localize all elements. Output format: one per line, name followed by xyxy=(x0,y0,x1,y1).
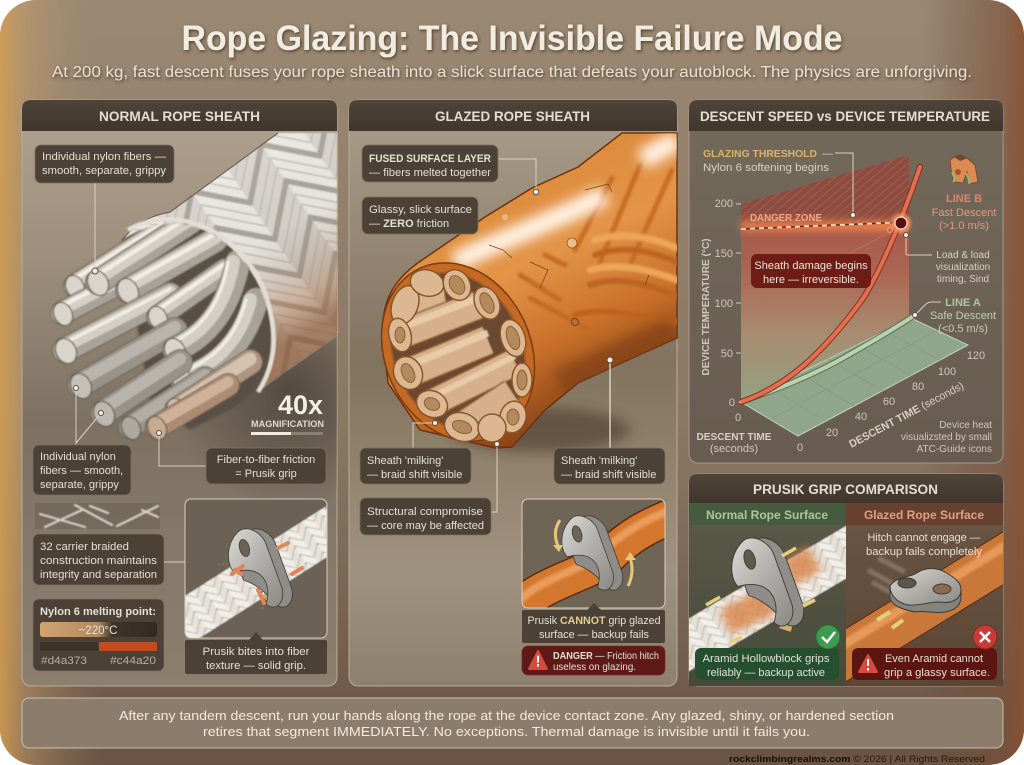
y axis labels: 50 xyxy=(721,348,733,360)
depth axis labels: 20 xyxy=(826,427,838,439)
chart floor xyxy=(741,318,968,436)
melting point card: ~220°C xyxy=(79,625,117,637)
callout: sheath milking right: — braid shift visible xyxy=(561,469,656,481)
caption: aramid grips: reliably — backup active xyxy=(707,667,825,679)
callout: structural compromise xyxy=(360,442,500,535)
caption: prusik cannot grip xyxy=(522,603,665,643)
label: glazing threshold xyxy=(703,148,856,218)
callout: sheath milking left: — braid shift visible xyxy=(367,469,462,481)
callout: load visualization: timing, Sind xyxy=(937,274,989,285)
caption: prusik cannot grip: surface — backup fails xyxy=(539,629,649,641)
callout: structural compromise: — core may be affected xyxy=(367,520,484,532)
note: device heat: visualizsted by small xyxy=(901,432,992,443)
legend: line A: (<0.5 m/s) xyxy=(938,323,988,335)
callout: sheath damage: Sheath damage begins xyxy=(754,260,868,272)
icon: cross xyxy=(973,625,997,649)
callout: 32 carrier braid: construction maintains xyxy=(40,555,158,567)
legend: line B: Fast Descent xyxy=(932,207,996,219)
x axis title xyxy=(696,431,772,455)
rope illustration: normal sheath with exposed fibers xyxy=(50,133,337,443)
danger point marker xyxy=(891,213,911,233)
illustration: slip on glazed rope xyxy=(830,540,1015,665)
label: glazing threshold: — xyxy=(822,148,833,160)
subtitle: At 200 kg, fast descent fuses your rope sheath into a slick surface that defeats your autoblock. The physics are unforgiving. xyxy=(52,64,972,81)
column: glazed rope surface xyxy=(846,503,1003,686)
y axis labels: 200 xyxy=(715,198,733,210)
chart back wall xyxy=(741,155,909,402)
legend: line B xyxy=(932,193,996,232)
panel header: glazed xyxy=(349,100,677,131)
panel header: chart: DESCENT SPEED vs DEVICE TEMPERATURE xyxy=(700,109,990,124)
callout: glassy surface: — ZERO friction xyxy=(369,218,449,230)
y axis labels: 150 xyxy=(715,248,733,260)
caption: aramid grips: Aramid Hollowblock grips xyxy=(702,653,830,665)
text: hitch cannot engage xyxy=(866,532,982,558)
callout: fiber friction: = Prusik grip xyxy=(235,468,297,480)
depth axis title: DESCENT TIME (seconds) xyxy=(847,380,966,451)
depth axis labels: 60 xyxy=(883,396,895,408)
danger warning: useless on glazing. xyxy=(553,661,636,673)
callout: individual fibers lower xyxy=(33,386,131,495)
magnification badge: MAGNIFICATION xyxy=(251,419,324,429)
melting point card: #d4a373 xyxy=(41,655,87,667)
subheader: glazed surface: Glazed Rope Surface xyxy=(864,508,984,522)
callout: sheath milking left xyxy=(360,420,471,484)
callout: fused surface layer: FUSED SURFACE LAYER xyxy=(369,153,491,165)
y axis title: DEVICE TEMPERATURE (°C) xyxy=(700,238,712,376)
label: danger zone: DANGER ZONE xyxy=(750,212,822,224)
legend: line A: LINE A xyxy=(945,297,981,309)
icon: loose fibre strands xyxy=(35,503,160,529)
bottom advisory bar: After any tandem descent, run your hands along the rope at the device contact zone. Any glazed, shiny, or hardened section xyxy=(119,708,894,723)
panel header: chart xyxy=(689,100,1003,131)
callout: fused surface layer: — fibers melted together xyxy=(369,167,491,179)
label: glazing threshold: GLAZING THRESHOLD xyxy=(703,148,817,160)
note: device heat: ATC-Guide icons xyxy=(917,444,992,455)
melting point card: Nylon 6 melting point: xyxy=(40,606,156,618)
depth axis labels: 0 xyxy=(797,442,803,454)
depth axis labels: 100 xyxy=(938,366,956,378)
note: device heat: Device heat xyxy=(939,420,992,431)
melting point card xyxy=(33,599,164,671)
danger warning xyxy=(522,646,665,675)
callout: fiber friction xyxy=(156,430,326,484)
callout: individual fibers top xyxy=(35,145,174,274)
panel: descent speed chart xyxy=(689,100,1003,463)
callout: glassy surface: Glassy, slick surface xyxy=(369,204,472,216)
line B: fast descent xyxy=(741,167,920,402)
line A: safe descent xyxy=(741,317,912,402)
caption: prusik cannot grip: Prusik CANNOT grip glazed xyxy=(528,615,660,627)
callout: sheath milking right: Sheath 'milking' xyxy=(561,455,637,467)
callout: load visualization xyxy=(904,232,990,285)
subheader: normal surface: Normal Rope Surface xyxy=(706,508,828,522)
y axis labels xyxy=(715,198,741,424)
text: hitch cannot engage: Hitch cannot engage — xyxy=(868,532,980,544)
depth axis labels: 120 xyxy=(967,350,985,362)
illustration: grip on normal rope xyxy=(675,538,860,653)
callout: structural compromise: Structural compromise xyxy=(367,506,483,518)
text: hitch cannot engage: backup fails completely xyxy=(866,546,982,558)
magnification badge xyxy=(251,390,324,435)
caption: aramid cannot grip xyxy=(852,648,997,680)
panel header: normal xyxy=(22,100,337,131)
panel header: glazed: GLAZED ROPE SHEATH xyxy=(435,109,590,124)
bottom advisory bar: retires that segment IMMEDIATELY. No exceptions. Thermal damage is invisible until it fails you. xyxy=(203,724,810,739)
icon: orange device xyxy=(950,154,978,184)
y axis labels: 0 xyxy=(729,397,735,409)
legend: line B: (>1.0 m/s) xyxy=(939,220,989,232)
caption: prusik bites xyxy=(185,632,327,674)
legend: line B: LINE B xyxy=(946,193,982,205)
note: device heat xyxy=(901,420,992,455)
panel header: normal: NORMAL ROPE SHEATH xyxy=(99,109,260,124)
threshold glow and dashed line xyxy=(741,221,908,231)
panel: glazed rope sheath xyxy=(349,100,677,686)
callout: sheath damage: here — irreversible. xyxy=(763,274,859,286)
y axis labels: 100 xyxy=(715,298,733,310)
callout: fused surface layer xyxy=(362,145,539,195)
icon: check xyxy=(816,625,840,649)
callout: sheath milking left: Sheath 'milking' xyxy=(367,455,443,467)
callout: 32 carrier braid: 32 carrier braided xyxy=(40,541,129,553)
depth axis labels: 80 xyxy=(912,381,924,393)
callout: glassy surface xyxy=(362,197,478,234)
magnification badge: 40x xyxy=(278,390,323,420)
title: Rope Glazing: The Invisible Failure Mode xyxy=(182,19,842,58)
melting point card: #c44a20 xyxy=(110,655,156,667)
caption: aramid cannot grip: Even Aramid cannot xyxy=(885,653,983,665)
3d line chart xyxy=(696,155,985,455)
callout: individual fibers top: smooth, separate, grippy xyxy=(42,165,166,177)
callout: sheath milking right xyxy=(554,357,665,484)
callout: 32 carrier braid: integrity and separation xyxy=(40,569,157,581)
x axis title: DESCENT TIME xyxy=(696,431,772,443)
panel: normal rope sheath xyxy=(22,100,337,686)
callout: 32 carrier braid xyxy=(33,534,185,585)
callout: individual fibers lower: separate, grippy xyxy=(40,479,119,491)
icon: warning triangle xyxy=(529,651,547,669)
label: glazing threshold: Nylon 6 softening begins xyxy=(703,162,830,174)
callout: individual fibers top: Individual nylon fibers — xyxy=(42,151,166,163)
panel: prusik grip comparison xyxy=(675,474,1015,686)
column: normal rope surface xyxy=(689,503,846,686)
callout: load visualization: Load & load xyxy=(936,250,990,261)
prusik inset: fails on glazed rope xyxy=(522,498,666,608)
callout: load visualization: visualization xyxy=(936,262,990,273)
bottom advisory bar xyxy=(22,698,1003,748)
danger warning: DANGER — Friction hitch xyxy=(553,650,659,662)
prusik inset: solid grip xyxy=(184,498,328,638)
subheader: normal surface xyxy=(689,503,846,525)
caption: aramid cannot grip: grip a glassy surface. xyxy=(884,667,990,679)
subheader: glazed surface xyxy=(846,503,1003,525)
legend: line A: Safe Descent xyxy=(930,310,996,322)
caption: prusik bites: Prusik bites into fiber xyxy=(202,646,310,658)
caption: aramid grips xyxy=(695,648,839,680)
depth axis labels: 40 xyxy=(855,411,867,423)
callout: fiber friction: Fiber-to-fiber friction xyxy=(217,454,315,466)
depth axis labels xyxy=(797,350,985,454)
footer credit: rockclimbingrealms.com © 2026 | All Rights Reserved xyxy=(729,754,985,765)
callout: individual fibers lower: Individual nylon xyxy=(40,451,116,463)
callout: sheath damage xyxy=(751,228,892,288)
x axis title: (seconds) xyxy=(710,443,758,455)
y axis labels: 0 xyxy=(735,412,741,424)
caption: prusik bites: texture — solid grip. xyxy=(206,660,306,672)
panel header: prusik comparison: PRUSIK GRIP COMPARISON xyxy=(753,482,938,497)
legend: line A xyxy=(912,297,996,335)
callout: individual fibers lower: fibers — smooth, xyxy=(40,465,123,477)
rope illustration: glazed sheath xyxy=(354,133,677,466)
panel header: prusik comparison xyxy=(689,474,1003,503)
